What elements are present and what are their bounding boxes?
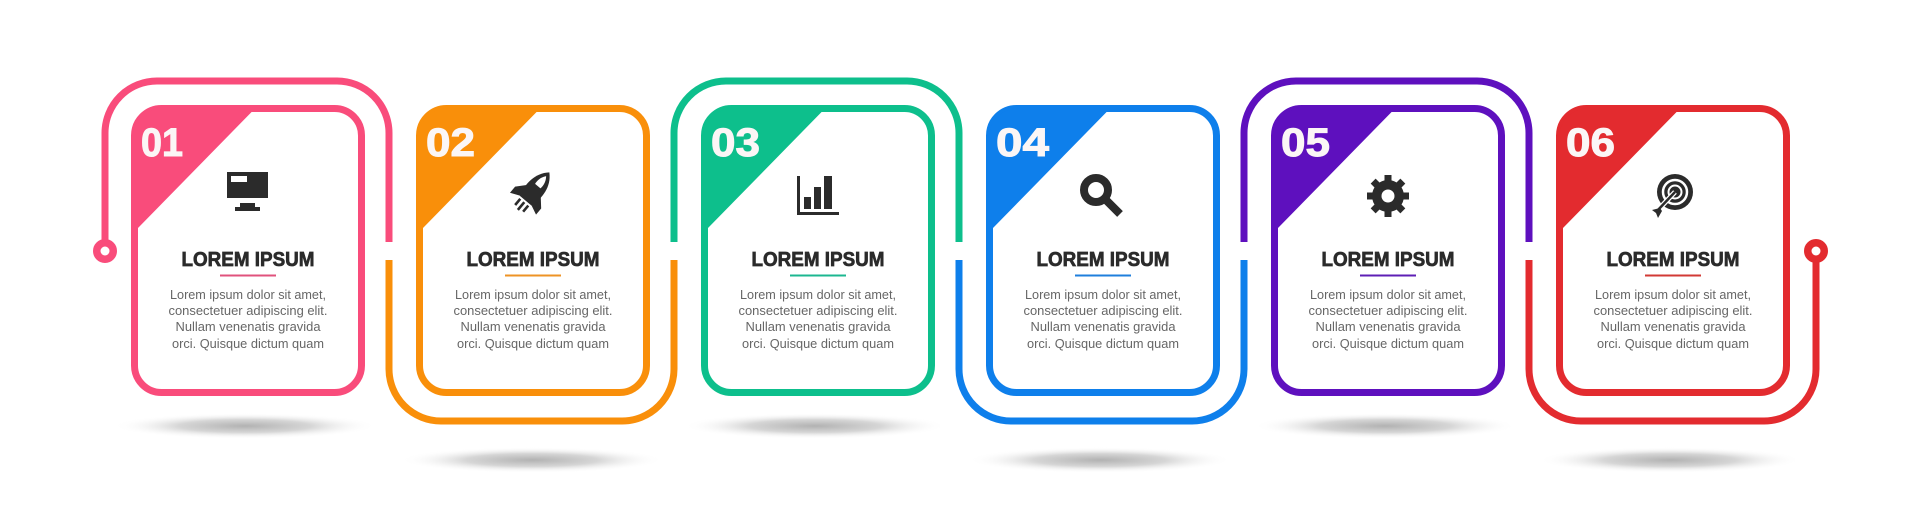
body text: Nullam venenatis gravida [460,319,606,334]
body text: orci. Quisque dictum quam [1597,336,1749,351]
icon: rocket [505,161,562,221]
icon: monitor [227,172,268,211]
number 04: 04 [996,121,1050,165]
shadow: card 4 [968,447,1232,473]
connector: purple line [1244,81,1529,242]
shadow: card 6 [1538,447,1802,473]
number 02: 02 [426,121,475,165]
body text [168,287,328,351]
body text: consectetuer adipiscing elit. [454,303,612,318]
panel: card 03 [704,108,932,392]
heading: LOREM IPSUM [1606,249,1740,271]
number 03: 03 [711,121,760,165]
panel: card 06 [1560,108,1786,392]
connector: orange line [389,260,674,421]
connector: green line [674,81,959,242]
body text: Nullam venenatis gravida [176,319,321,334]
body text: Nullam venenatis gravida [1600,319,1746,334]
number badge 06 [1560,108,1680,228]
connector: pink line with start node [97,81,389,259]
number badge 01 [134,108,255,228]
body text: Nullam venenatis gravida [1030,319,1176,334]
underline [505,274,561,276]
number 05: 05 [1281,121,1330,165]
body text: Lorem ipsum dolor sit amet, [1310,287,1466,302]
shadow: card 2 [400,447,664,473]
body text: Nullam venenatis gravida [1316,319,1461,334]
heading: LOREM IPSUM [752,249,884,271]
panel: card 05 [1274,108,1502,392]
number badge 05 [1274,108,1395,228]
body text: Lorem ipsum dolor sit amet, [170,287,326,302]
icon: gear [1367,175,1409,217]
panel: card 04 [990,108,1216,392]
connector: blue line [959,260,1244,421]
shadow: card 3 [683,413,947,439]
underline [1360,274,1416,276]
number 06: 06 [1566,121,1615,165]
number badge 03 [704,108,825,228]
icon: target [1652,174,1693,218]
body text: Lorem ipsum dolor sit amet, [740,287,896,302]
body text: Nullam venenatis gravida [746,319,891,334]
heading: LOREM IPSUM [466,249,600,271]
connector: red line with end node [1529,243,1824,421]
body text: Lorem ipsum dolor sit amet, [1595,287,1751,302]
number badge 04 [990,108,1110,228]
body text [1594,287,1752,351]
body text: orci. Quisque dictum quam [1312,336,1464,351]
number badge 02 [420,108,540,228]
body text [454,287,612,351]
underline [790,274,846,276]
body text: consectetuer adipiscing elit. [1024,303,1182,318]
underline [1645,274,1701,276]
body text: orci. Quisque dictum quam [1027,336,1179,351]
body text [1308,287,1468,351]
body text: consectetuer adipiscing elit. [1594,303,1752,318]
number 01: 01 [141,121,183,165]
body text: consectetuer adipiscing elit. [738,303,898,318]
heading: LOREM IPSUM [1036,249,1170,271]
icon: magnifier [1084,178,1120,214]
body text: orci. Quisque dictum quam [742,336,894,351]
icon: bar chart [797,176,839,215]
shadow: card 1 [113,413,377,439]
body text [1024,287,1182,351]
underline [1075,274,1131,276]
body text: Lorem ipsum dolor sit amet, [1025,287,1181,302]
heading: LOREM IPSUM [182,249,314,271]
body text: Lorem ipsum dolor sit amet, [455,287,611,302]
heading: LOREM IPSUM [1322,249,1454,271]
body text: orci. Quisque dictum quam [457,336,609,351]
body text [738,287,898,351]
underline [220,274,276,276]
panel: card 01 [134,108,362,392]
body text: consectetuer adipiscing elit. [1308,303,1468,318]
shadow: card 5 [1253,413,1517,439]
panel: card 02 [420,108,646,392]
body text: orci. Quisque dictum quam [172,336,324,351]
body text: consectetuer adipiscing elit. [168,303,328,318]
